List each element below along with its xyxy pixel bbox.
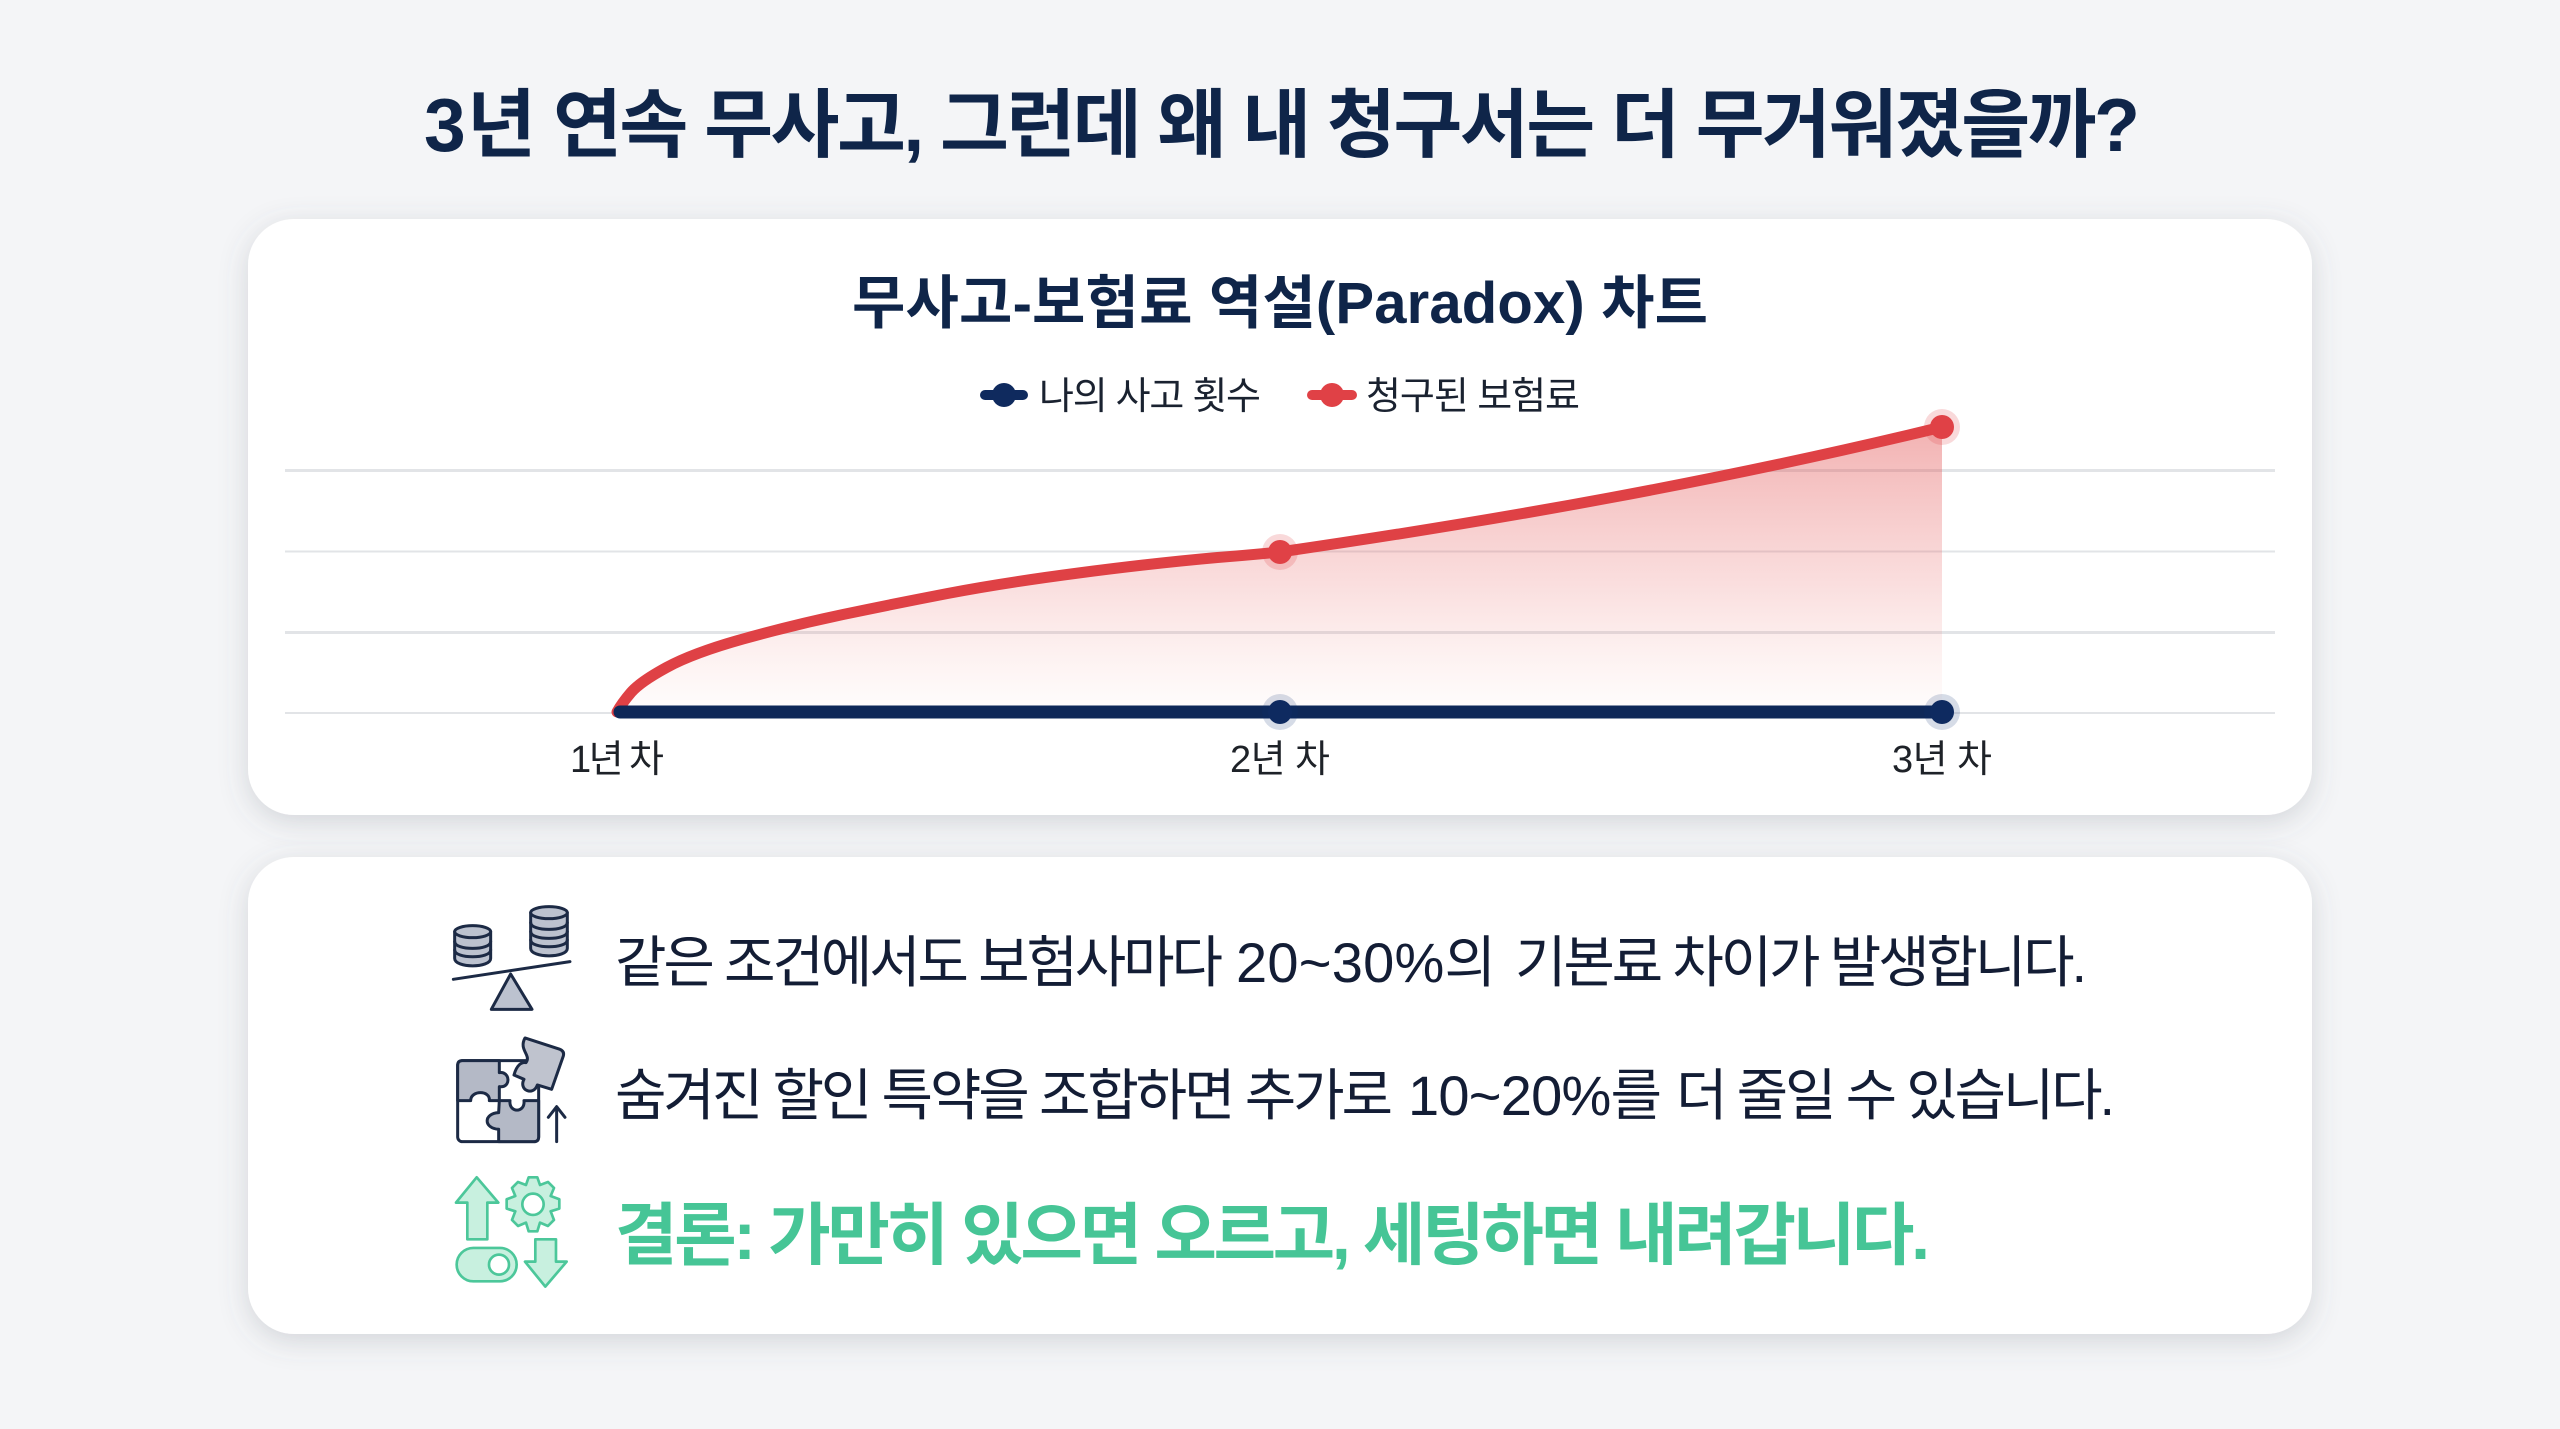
legend item: billed premium: 청구된 보험료 [1366,376,1580,418]
axis labels [570,739,1992,781]
premium points [1262,409,1960,570]
accident count line [620,706,1942,718]
title: 3년 [424,83,536,167]
premium line [617,427,1942,712]
text: base rate difference: 같은 조건에서도 보험사마다 [615,931,1223,994]
text: conclusion: 결론: 가만히 있으면 오르고, 세팅하면 내려갑니다. [615,1198,1930,1274]
legend [985,376,1580,418]
icon: balance scale with coins [453,907,570,1009]
text: base rate difference: 기본료 차이가 발생합니다. [1515,931,2087,994]
text: base rate difference [615,931,2087,994]
panel: takeaways card [248,857,2312,1334]
premium area fill [617,427,1942,712]
icon: puzzle pieces with arrow [458,1038,565,1142]
title: 연속 무사고, 그런데 왜 내 청구서는 더 무거워졌을까? [553,83,2140,167]
text: hidden discounts: 10~20%를 [1408,1064,1662,1127]
grid lines [285,470,2275,713]
legend item: accident count: 나의 사고 횟수 [1039,376,1261,418]
axis labels: 3년 차 [1892,739,1992,781]
text: hidden discounts: 더 줄일 수 있습니다. [1676,1064,2115,1127]
icon: arrows, gear and toggle [456,1177,567,1287]
chart title: 무사고-보험료 역설(Paradox) 차트 [852,271,1708,336]
text: hidden discounts: 숨겨진 할인 특약을 조합하면 추가로 [615,1064,1393,1127]
axis labels: 1년 차 [570,739,664,781]
panel: chart card [248,219,2312,815]
axis labels: 2년 차 [1230,739,1330,781]
accident count points [1262,694,1960,730]
text: hidden discounts [615,1064,2115,1127]
line chart [285,409,2275,781]
text: base rate difference: 20~30%의 [1236,931,1496,994]
